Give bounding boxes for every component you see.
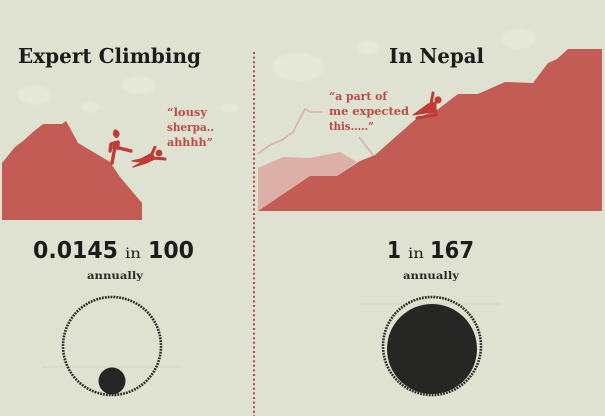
climber standing, kicking xyxy=(110,129,131,163)
statistic: 1 in 167 xyxy=(387,238,474,264)
quote: lousy sherpa: sherpa.. xyxy=(167,121,214,134)
climber falling on slope xyxy=(413,93,442,118)
title: Expert Climbing: Expert Climbing xyxy=(18,44,201,68)
statistic: 0.0145 in 100 xyxy=(33,238,194,264)
cloud: left group xyxy=(17,76,238,112)
chart: right probability circle xyxy=(360,297,500,395)
statistic: 1 in 167: 167 xyxy=(430,238,474,264)
quote: a part of me expected this: me expected xyxy=(329,105,409,118)
quote: a part of me expected this: this.....” xyxy=(329,120,374,133)
title: In Nepal: In Nepal xyxy=(389,44,484,68)
label: annually left: annually xyxy=(87,270,144,282)
dotted divider xyxy=(253,52,255,416)
quote: lousy sherpa: “lousy xyxy=(167,106,208,119)
left mountain xyxy=(2,121,142,220)
sherpa falling xyxy=(132,147,165,167)
statistic: 0.0145 in 100: 100 xyxy=(148,238,194,264)
label: annually right: annually xyxy=(403,270,460,282)
quote: a part of me expected this: “a part of xyxy=(329,90,388,103)
chart: left probability circle xyxy=(42,297,180,395)
statistic: 0.0145 in 100: in xyxy=(125,246,141,262)
statistic: 1 in 167: 1 xyxy=(387,238,401,264)
cloud: right group xyxy=(272,29,536,81)
statistic: 1 in 167: in xyxy=(408,246,424,262)
background outline peak xyxy=(258,109,373,155)
statistic: 0.0145 in 100: 0.0145 xyxy=(33,238,118,264)
quote: lousy sherpa: ahhhh” xyxy=(167,136,213,149)
pale background mountain xyxy=(258,152,357,211)
right mountain xyxy=(258,49,602,211)
